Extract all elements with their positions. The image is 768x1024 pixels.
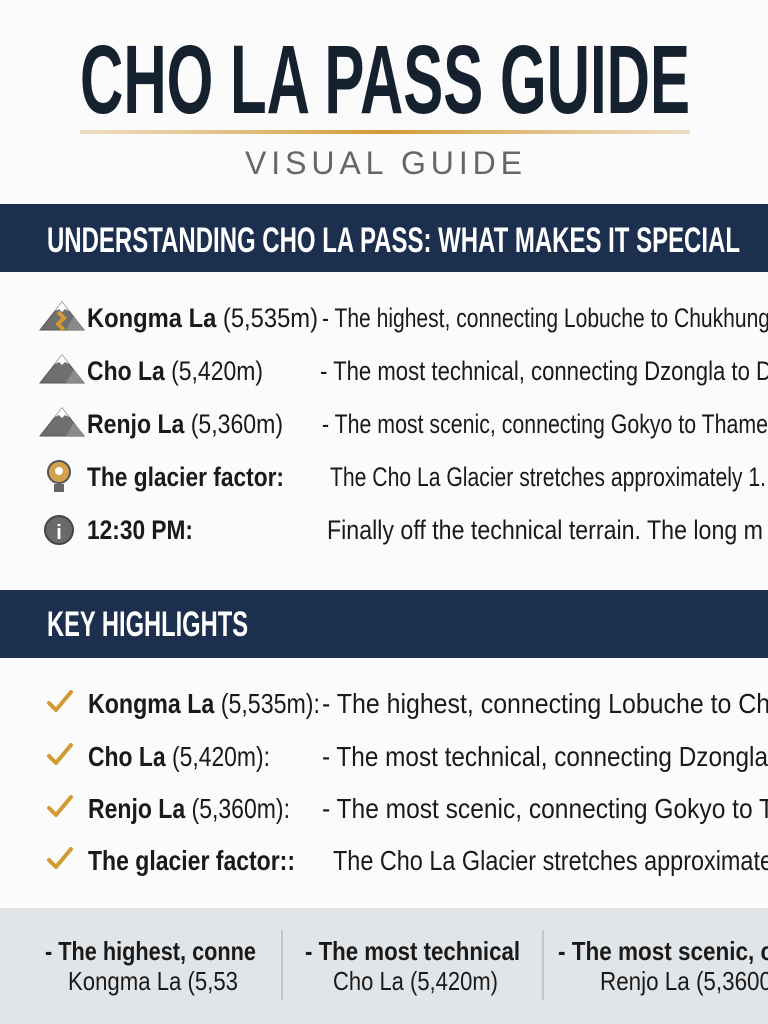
highlight: glacier — [49, 845, 768, 876]
row: 12:30 PM: 12:30 PM: — [87, 515, 193, 545]
row: Renjo La: Renjo La (5,360m) — [87, 409, 283, 439]
highlight: Cho La — [49, 741, 768, 772]
list: passes — [40, 302, 768, 545]
highlight: glacier: The glacier factor:: — [88, 845, 295, 876]
row: Renjo La — [40, 408, 768, 439]
bottom summary band — [0, 908, 768, 1024]
row: Cho La — [40, 355, 768, 386]
row: Kongma La — [40, 302, 768, 333]
summary col 1 — [45, 936, 256, 996]
highlight: Renjo La: Renjo La (5,360m): — [88, 793, 290, 824]
row: 12:30 PM — [45, 515, 763, 545]
gold divider — [80, 130, 690, 134]
summary col 1: - The highest, conne — [45, 936, 256, 966]
subtitle: VISUAL GUIDE — [245, 145, 522, 181]
banner: key highlights: KEY HIGHLIGHTS — [47, 605, 248, 644]
highlight: Kongma La — [49, 688, 768, 719]
row: Cho La: Cho La (5,420m) — [87, 356, 263, 386]
row: glacier factor — [48, 461, 766, 492]
banner: key highlights — [0, 590, 768, 658]
row: glacier factor: The glacier factor: — [87, 462, 284, 492]
highlight: Kongma La: Kongma La (5,535m): — [88, 688, 320, 719]
summary col 2: - The most technical — [305, 936, 520, 966]
row: 12:30 PM: i — [56, 522, 62, 544]
summary col 1: Kongma La (5,53 — [68, 966, 238, 996]
row: Kongma La: Kongma La (5,535m) — [87, 303, 318, 333]
list: key highlights — [49, 688, 768, 876]
summary col 2 — [305, 936, 520, 996]
highlight: Cho La: Cho La (5,420m): — [88, 741, 270, 772]
highlight: Renjo La — [49, 793, 768, 824]
summary col 2: Cho La (5,420m) — [333, 966, 498, 996]
banner: understanding — [0, 204, 768, 272]
summary col 3 — [558, 936, 768, 996]
